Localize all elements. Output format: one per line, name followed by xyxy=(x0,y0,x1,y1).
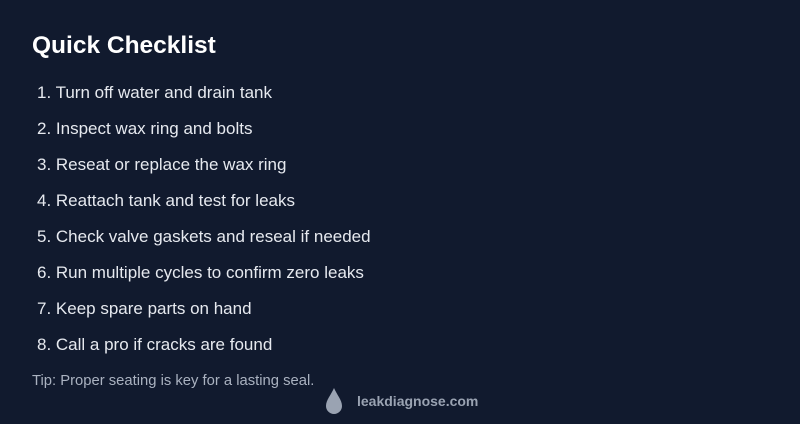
tip text: Tip: Proper seating is key for a lasting seal. xyxy=(32,373,314,389)
brand footer: leakdiagnose.com xyxy=(357,393,478,409)
checklist: 8. Call a pro if cracks are found xyxy=(37,335,272,354)
checklist: 3. Reseat or replace the wax ring xyxy=(37,155,286,174)
checklist: 6. Run multiple cycles to confirm zero leaks xyxy=(37,263,364,282)
icon: water drop xyxy=(326,388,342,414)
checklist: 5. Check valve gaskets and reseal if needed xyxy=(37,227,371,246)
checklist: 1. Turn off water and drain tank xyxy=(37,83,272,102)
checklist: 2. Inspect wax ring and bolts xyxy=(37,119,252,138)
checklist xyxy=(37,83,371,354)
title: Quick Checklist xyxy=(32,32,216,59)
brand footer xyxy=(326,388,478,414)
checklist: 7. Keep spare parts on hand xyxy=(37,299,252,318)
checklist: 4. Reattach tank and test for leaks xyxy=(37,191,295,210)
